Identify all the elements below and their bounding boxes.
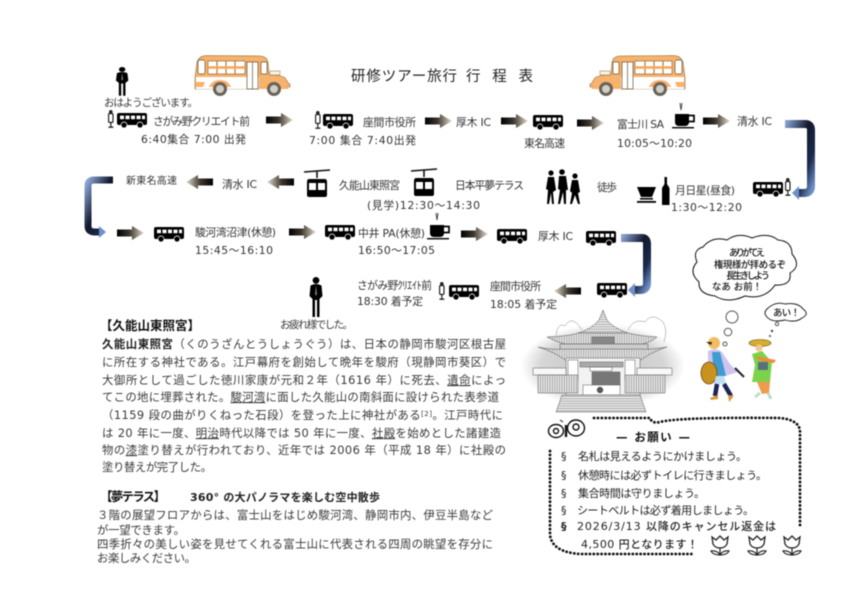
stop: Zama city hall: 座間市役所 [363,115,416,129]
Nihondaira Yume Terrace: 日本平夢テラス [455,178,524,192]
Nakai PA rest: 16:50～17:05 [358,244,435,257]
figure: old man [701,337,744,402]
Shin-Tomei expressway: 新東名高速 [126,174,177,187]
Kunozan Toshogu label: 久能山東照宮 [339,178,400,192]
body paragraph: 。江戸時代に [432,408,503,422]
Kunozan Toshogu label [339,178,480,212]
body paragraph: が一望できます。 [97,523,185,537]
section: Kunozan Toshogu [100,318,506,474]
icon: bowl and bottle [637,177,670,205]
icon: gondola left [304,170,330,197]
arrow [703,114,730,128]
Shimizu IC: 清水 IC [222,177,257,191]
body paragraph: 塗り替えが完了した。 [102,460,212,474]
list: 2026/3/13 以降のキャンセル返金は [577,519,776,533]
title [351,68,534,85]
Nakai PA rest: 中井 PA(休憩) [358,226,425,240]
curved arrow right 2 [621,238,647,297]
arrow [501,114,528,128]
arrow [425,114,452,128]
Zama arrival [490,279,557,311]
body paragraph: は 20 年に一度、明治時代以降では 50 年に一度、社殿を始めとした諸建造 [102,426,501,440]
arrow left [186,175,213,189]
list: 名札は見えるようにかけましょう。 [578,449,747,463]
title: 研修ツアー旅行 [351,68,457,85]
Fujikawa SA [617,103,694,150]
stop: Zama city hall [309,111,416,147]
icon: tulips [711,536,801,555]
body paragraph: 大御所として過ごした徳川家康が元和２年（1616 年）に死去、遺命によっ [102,373,506,387]
list: § [561,469,566,482]
illustration: travellers [693,235,806,402]
stop: Zama city hall: 7:00 集合 7:40出発 [309,133,416,147]
greeting: おはようございます。 [104,96,198,109]
Tomei expressway: 東名高速 [524,136,565,150]
thought cloud: 長生きしよう [726,270,770,282]
title: 行 程 表 [466,68,534,85]
arrow [117,226,144,240]
body paragraph: 久能山東照宮（くのうざんとうしょうぐう）は、日本の静岡市駿河区根古屋 [102,337,506,351]
dotted frame [550,418,800,554]
walk label: 徒歩 [597,180,617,194]
Zama arrival: 18:05 着予定 [490,297,557,311]
icon: bowing person evening [310,277,322,317]
curved arrow left [88,180,113,238]
icon: walking people [546,169,580,204]
Surugawan Numazu rest: 15:45～16:10 [195,244,273,257]
Atsugi IC return [497,229,616,246]
body paragraph: 物の漆塗り替えが行われており、近年では 2006 年（平成 18 年）に社殿の [102,443,506,457]
body paragraph: [2] [421,410,432,418]
Tsukihiboshi lunch [671,184,742,214]
illustration: vintage bus right [590,56,685,96]
list: § [561,504,566,517]
thought cloud: 権現様が拝めるぞ [714,259,786,271]
panel: requests [548,418,801,555]
list: § [561,520,567,533]
body paragraph: てこの地に埋葬された。駿河湾に面した久能山の南斜面に設けられた表参道 [102,390,499,404]
list: § [561,487,566,500]
Tsukihiboshi lunch: 月日星(昼食) [675,184,735,197]
Sagamino arrival [357,278,479,308]
arrow [289,225,316,239]
thought cloud: なあ お前！ [712,281,762,293]
body paragraph: （1159 段の曲がりくねった石段）を登った上に神社がある [102,408,421,422]
body paragraph: に所在する神社である。江戸幕府を創始して晩年を駿府（現静岡市葵区）で [102,355,506,369]
stop: Sagamino: 6:40集合 7:00 出発 [141,132,246,146]
arrow [461,227,488,241]
bus [597,283,627,298]
Sagamino arrival: さがみ野ｸﾘｴｲﾄ前 [357,278,432,292]
farewell: お疲れ様でした。 [280,318,353,331]
reply bubble: あい！ [773,308,800,319]
heading: 【夢テラス】 [100,489,166,504]
subheading: 360° の大パノラマを楽しむ空中散歩 [190,490,380,504]
list: § [561,450,566,463]
Zama arrival: 座間市役所 [490,279,541,293]
lunch stop [753,178,790,197]
Shimizu IC: 清水 IC [737,114,772,128]
body paragraph: ３階の展望フロアからは、富士山をはじめ駿河湾、静岡市内、伊豆半島など [97,508,494,522]
thought cloud: ありがてえ [729,247,765,259]
Surugawan Numazu rest [154,225,276,257]
body paragraph [102,337,506,474]
body paragraph: 四季折々の美しい姿を見せてくれる富士山に代表される四周の眺望を存分に [97,537,493,551]
Tomei expressway [524,115,565,150]
Kunozan Toshogu label: (見学)12:30～14:30 [367,198,480,212]
Nakai PA rest [325,213,449,257]
arrow left [267,175,294,189]
illustration: shrine [521,310,685,412]
heading: — お願い — [616,430,690,444]
Surugawan Numazu rest: 駿河湾沼津(休憩) [195,225,276,239]
icon: butterfly [548,420,584,438]
Sagamino arrival: 18:30 着予定 [357,294,423,308]
body paragraph [97,508,494,565]
Fujikawa SA: 富士川 SA [617,118,665,131]
stop: Sagamino: さがみ野クリエイト前 [153,114,250,128]
figure: woman [749,340,776,399]
Atsugi IC return: 厚木 IC [538,230,573,243]
icon: gondola right [411,169,437,196]
Atsugi IC: 厚木 IC [456,116,491,129]
arrow [266,113,293,127]
illustration: vintage bus left [195,56,290,96]
Fujikawa SA: 10:05～10:20 [617,137,692,150]
arrow [577,116,604,130]
list: 集合時間は守りましょう。 [578,486,705,500]
icon: bowing person morning [116,67,128,96]
thought cloud [693,235,797,346]
body paragraph: お楽しみください。 [97,551,196,565]
stop: Sagamino [108,110,250,146]
list: 4,500 円となります！ [581,538,698,551]
reply bubble [765,303,806,337]
heading: 【久能山東照宮】 [100,318,200,333]
list: シートベルトは必ず着用しましょう。 [577,503,754,517]
arrow left [554,284,581,298]
curved arrow right 1 [785,124,811,200]
list [561,449,776,551]
section: Yume Terrace [97,489,494,565]
list: 休憩時には必ずトイレに行きましょう。 [578,468,767,482]
Tsukihiboshi lunch: 1:30～12:20 [671,201,742,214]
